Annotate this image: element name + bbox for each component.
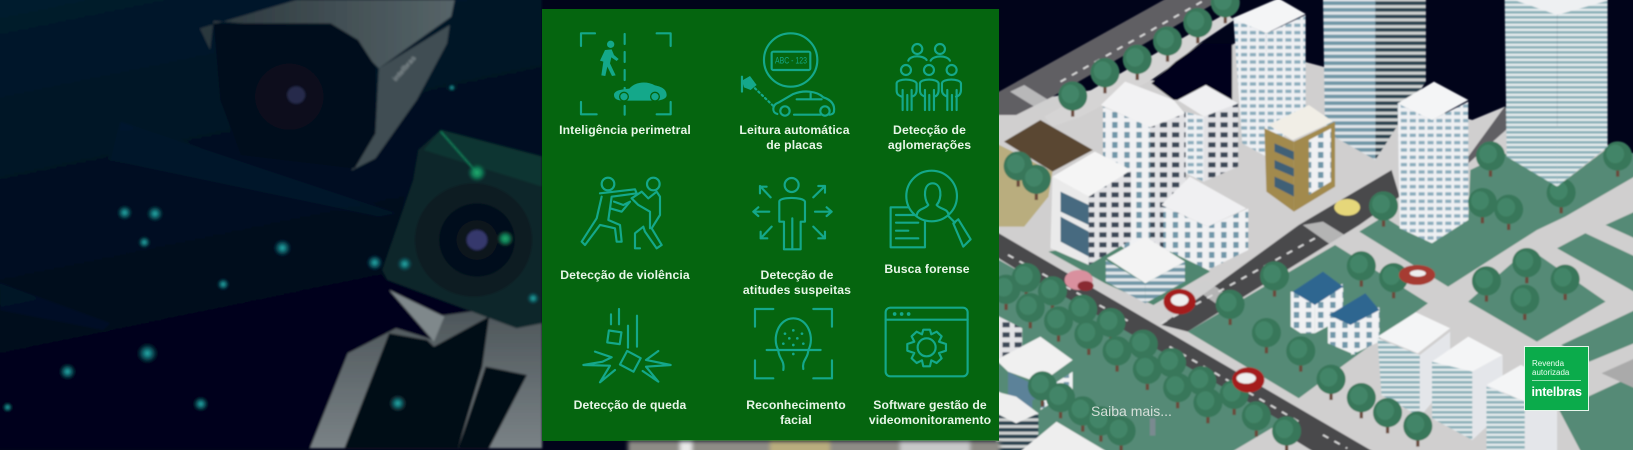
badge: revenda autorizada intelbras (1524, 346, 1588, 410)
crosswalks (1010, 85, 1347, 305)
label: software: videomonitoramento (869, 413, 991, 427)
building: arched roof (1101, 82, 1186, 267)
main roads (996, 232, 1388, 450)
blue houses (1291, 272, 1379, 355)
green lots (996, 258, 1283, 450)
label: face: facial (780, 413, 812, 427)
label: suspicious: Detecção de (761, 268, 833, 282)
link: saiba mais: Saiba mais... (1091, 403, 1172, 419)
icon: violence (582, 178, 662, 248)
building: front left (1050, 152, 1131, 265)
camera one (200, 0, 455, 171)
building: arched front (1161, 177, 1248, 270)
label: crowds: aglomerações (888, 138, 971, 152)
panel: video analytics features (542, 9, 999, 441)
ground (996, 0, 1633, 450)
label: plates: de placas (766, 138, 823, 152)
trees lower (992, 248, 1580, 450)
building: dark windows (1178, 85, 1238, 182)
icon: perimeter intelligence (581, 33, 671, 115)
building: brown (1264, 105, 1335, 212)
icon: forensic search (891, 171, 971, 247)
label: suspicious: atitudes suspeitas (743, 283, 851, 297)
building: low white (1106, 237, 1185, 303)
label: perimeter: Inteligência perimetral (559, 123, 691, 137)
badge: revenda autorizada intelbras: intelbras (1532, 385, 1582, 399)
tower: dark stripes (1323, 0, 1426, 160)
label: crowds: Detecção de (893, 123, 966, 137)
label: plates: Leitura automática (739, 123, 850, 137)
illustration: isometric city (992, 0, 1633, 450)
badge: revenda autorizada intelbras: Revenda (1532, 359, 1565, 368)
icon: fall detection (583, 309, 671, 382)
icon: suspicious behaviour (753, 178, 832, 249)
pedestrian (1146, 418, 1160, 436)
camera two (310, 130, 542, 448)
white buildings lower right (1377, 312, 1557, 450)
tower: top centre (1232, 0, 1306, 157)
icon: management software (886, 308, 968, 376)
icon: facial recognition (755, 309, 832, 378)
light streaks (0, 122, 396, 330)
label: violence: Detecção de violência (560, 268, 690, 282)
label: forensic: Busca forense (884, 262, 970, 276)
glowing particles (3, 84, 539, 412)
photo: security cameras (0, 0, 542, 448)
camera one: intelbras (391, 54, 418, 83)
tower: far right (1505, 0, 1608, 187)
label: software: Software gestão de (873, 398, 987, 412)
city strip below panel (628, 441, 1000, 450)
label: face: Reconhecimento (746, 398, 846, 412)
icon: plate reading (742, 33, 834, 116)
icon: crowd (897, 44, 961, 110)
road markings (1008, 255, 1347, 448)
building: white tower right (1398, 82, 1468, 243)
vehicles (1065, 199, 1435, 393)
label: fall: Detecção de queda (574, 398, 687, 412)
trees upper (1004, 0, 1632, 230)
icon: plate reading: ABC - 123 (775, 56, 807, 66)
badge: revenda autorizada intelbras: autorizada (1532, 368, 1570, 377)
buildings lower left (996, 315, 1107, 450)
